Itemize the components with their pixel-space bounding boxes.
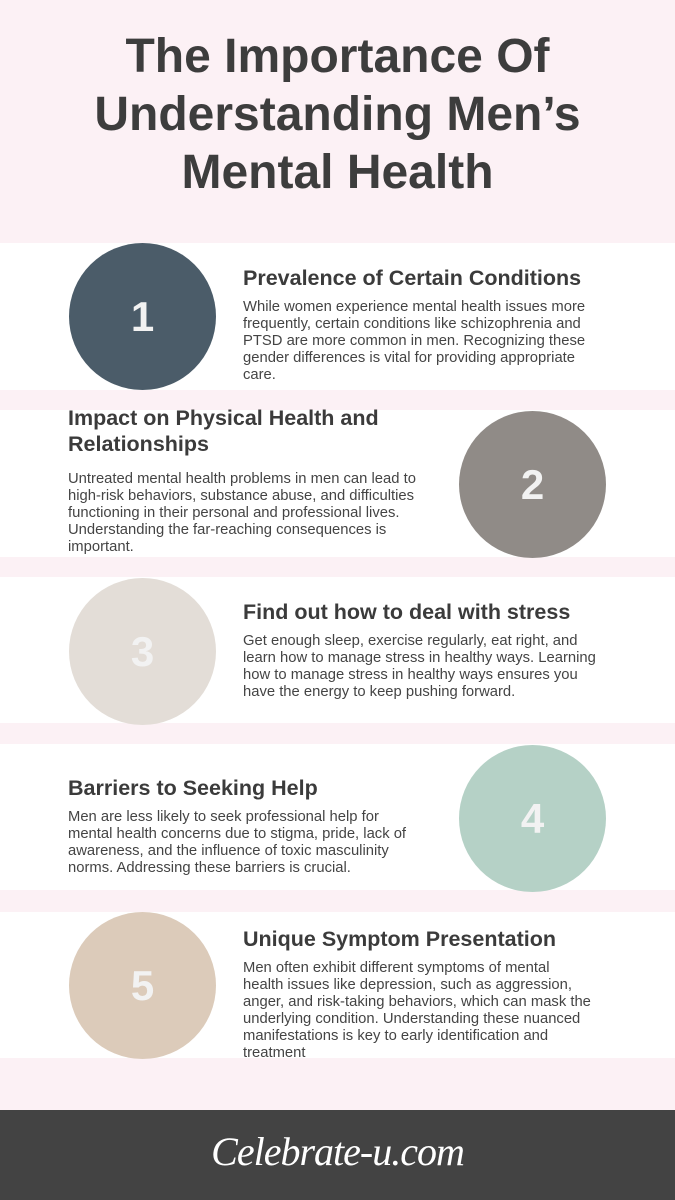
icon: circle 5	[69, 912, 216, 1059]
text: section 2: Understanding the far-reaching consequences is	[68, 522, 386, 538]
title: Understanding Men’s	[94, 88, 581, 141]
text: section 5: Unique Symptom Presentation	[243, 927, 556, 951]
text: section 2: high-risk behaviors, substance abuse, and difficulties	[68, 488, 414, 504]
text: section 1: While women experience mental health issues more	[243, 299, 585, 315]
icon: circle 4: 4	[521, 794, 544, 842]
text: section 2: Relationships	[68, 432, 209, 456]
text: section 3: Get enough sleep, exercise regularly, eat right, and	[243, 633, 578, 649]
text: section 4	[68, 776, 406, 876]
icon: circle 2	[459, 411, 606, 558]
icon: circle 5: 5	[131, 962, 154, 1008]
text: section 3: how to manage stress in healthy ways ensures you	[243, 667, 578, 683]
text: section 4: norms. Addressing these barriers is crucial.	[68, 860, 351, 876]
text: section 4: mental health concerns due to stigma, pride, lack of	[68, 826, 406, 842]
text: section 5	[243, 927, 591, 1061]
text: section 4: awareness, and the influence of toxic masculinity	[68, 843, 389, 859]
text: section 5: Men often exhibit different symptoms of mental	[243, 960, 550, 976]
text: section 5: health issues like depression, such as aggression,	[243, 977, 572, 993]
footer: Celebrate-u.com	[211, 1129, 464, 1174]
text: section 3: learn how to manage stress in healthy ways. Learning	[243, 650, 596, 666]
text: section 5: treatment	[243, 1045, 306, 1061]
icon: circle 4	[459, 745, 606, 892]
icon: circle 3: 3	[131, 628, 154, 674]
text: section 2: functioning in their personal and professional lives.	[68, 505, 400, 521]
icon: circle 2: 2	[521, 460, 544, 508]
text: section 3	[243, 600, 596, 700]
text: section 5: anger, and risk-taking behaviors, which can mask the	[243, 994, 591, 1010]
text: section 1: frequently, certain conditions like schizophrenia and	[243, 316, 581, 332]
text: section 1: PTSD are more common in men. Recognizing these	[243, 333, 585, 349]
title: The Importance Of	[125, 30, 550, 83]
text: section 5: manifestations is key to early identification and	[243, 1028, 548, 1044]
text: section 2: Untreated mental health problems in men can lead to	[68, 471, 416, 487]
footer	[0, 1110, 675, 1200]
text: section 5: underlying condition. Understanding these nuanced	[243, 1011, 580, 1027]
text: section 4: Barriers to Seeking Help	[68, 776, 318, 800]
icon: circle 3	[69, 578, 216, 725]
text: section 1	[243, 266, 585, 383]
icon: circle 1: 1	[131, 292, 154, 340]
text: section 2	[68, 406, 416, 555]
text: section 4: Men are less likely to seek professional help for	[68, 809, 379, 825]
icon: circle 1	[69, 243, 216, 390]
text: section 1: Prevalence of Certain Conditions	[243, 266, 581, 290]
text: section 1: care.	[243, 367, 276, 383]
text: section 2: important.	[68, 539, 134, 555]
text: section 1: gender differences is vital for providing appropriate	[243, 350, 575, 366]
text: section 3: Find out how to deal with stress	[243, 600, 570, 624]
text: section 3: have the energy to keep pushing forward.	[243, 684, 515, 700]
title: Mental Health	[181, 146, 494, 199]
text: section 2: Impact on Physical Health and	[68, 406, 379, 430]
title	[94, 30, 581, 199]
